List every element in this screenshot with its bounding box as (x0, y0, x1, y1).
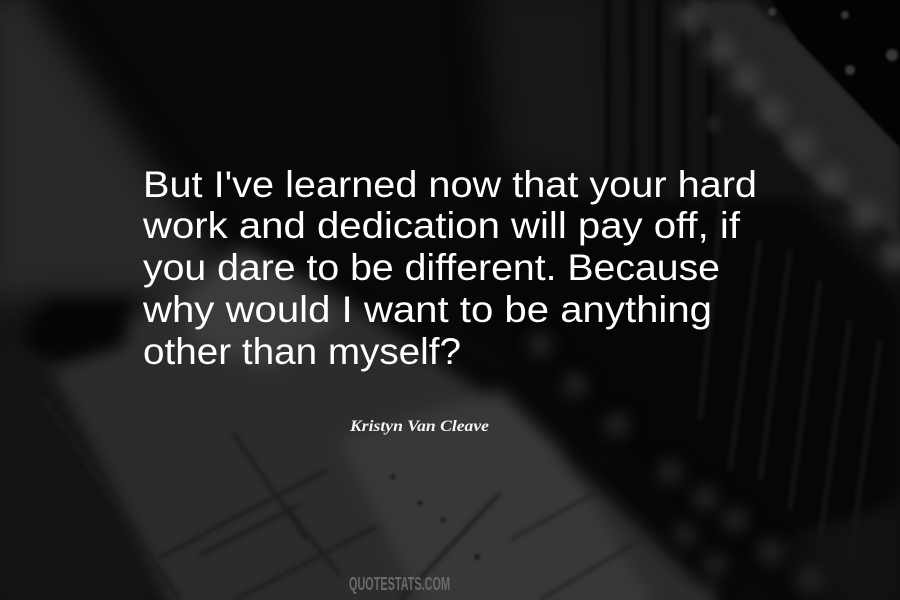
paper lines (43, 397, 640, 600)
quote text: other than myself? (143, 331, 461, 372)
blurred key spots (676, 4, 900, 270)
quote text (142, 164, 757, 372)
quote text: you dare to be different. Because (143, 247, 720, 288)
paper marks (390, 474, 480, 560)
author name: Kristyn Van Cleave (349, 418, 489, 435)
watermark: QUOTESTATS.COM (349, 574, 450, 594)
top-right diagonal panel (690, 0, 900, 240)
right-side piano stripes (608, 0, 880, 560)
top-right studs (768, 8, 898, 75)
quote text: work and dedication will pay off, if (142, 205, 741, 246)
quote text: But I've learned now that your hard (143, 164, 757, 205)
quote text: why would I want to be anything (142, 289, 712, 330)
